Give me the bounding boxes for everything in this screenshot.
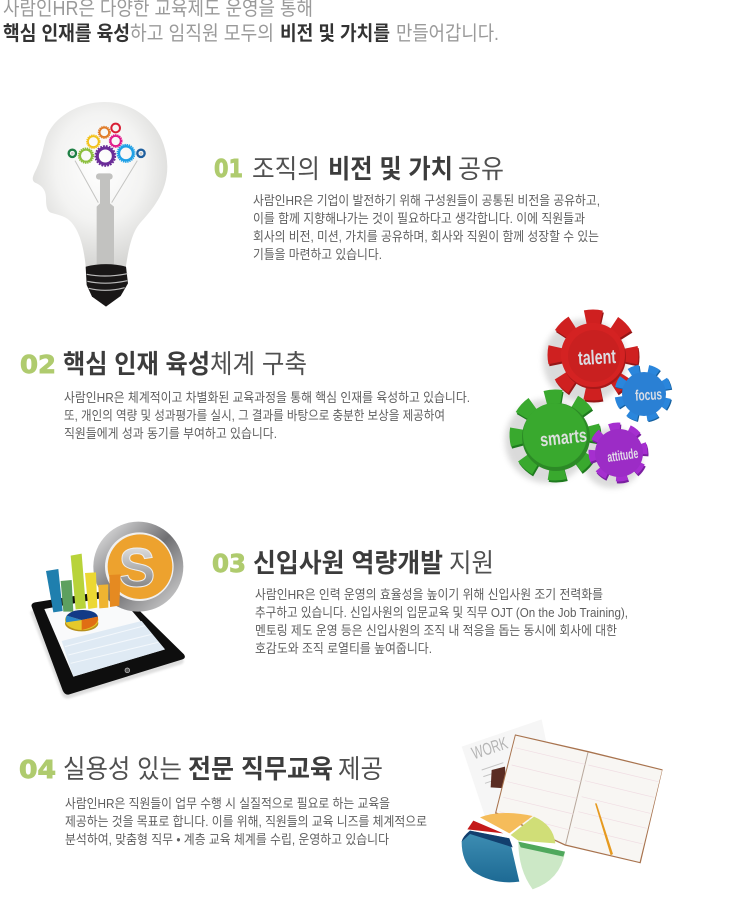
gear: focus: focus (635, 386, 663, 405)
icon: tablet with charts and coin (30, 522, 185, 698)
heading 03: 지원 (449, 548, 494, 578)
intro heading: 핵심 인재를 육성 (3, 22, 130, 45)
gear: focus (615, 365, 672, 422)
body 01: 이를 함께 지향해나가는 것이 필요하다고 생각합니다. 이에 직원들과 (253, 211, 585, 226)
heading 01 (252, 154, 504, 184)
gear: attitude (585, 419, 652, 487)
heading 01: 비전 및 가치 (328, 154, 453, 184)
heading 04: 전문 직무교육 (188, 754, 333, 784)
section 02 (20, 349, 470, 441)
section 04 (19, 754, 427, 847)
body 01: 기틀을 마련하고 있습니다. (253, 247, 382, 262)
pencil (595, 803, 613, 855)
heading 04: 실용성 있는 (63, 754, 182, 784)
coin (93, 522, 183, 612)
number 02: 02 (20, 350, 56, 379)
small gears (69, 124, 145, 165)
work paper: WORK (469, 733, 510, 763)
heading 04: 제공 (338, 754, 383, 784)
gear: talent: talent (577, 346, 617, 370)
pie chart (65, 610, 98, 631)
coin: S (119, 536, 155, 598)
number 03: 03 (212, 549, 246, 578)
body 01: 회사의 비전, 미션, 가치를 공유하며, 회사와 직원이 함께 성장할 수 있는 (253, 229, 599, 244)
intro heading: 비전 및 가치를 (280, 22, 390, 45)
pie chart (462, 813, 565, 889)
body 01: 사람인HR은 기업이 발전하기 위해 구성원들이 공통된 비전을 공유하고, (253, 193, 600, 208)
heading 02: 핵심 인재 육성 (63, 349, 210, 379)
number 01: 01 (214, 154, 243, 183)
body 04 (65, 796, 427, 847)
gear: talent (555, 317, 632, 395)
section 01 (214, 154, 600, 262)
notebook (495, 734, 663, 863)
body 02: 또, 개인의 역량 및 성과평가를 실시, 그 결과를 바탕으로 충분한 보상을 제공하여 (64, 408, 445, 423)
body 02 (64, 390, 470, 441)
section 03 (212, 548, 628, 656)
icon: light bulb head with gears (33, 102, 167, 307)
body 03: 호감도와 조직 로열티를 높여줍니다. (255, 641, 432, 656)
intro heading: 하고 임직원 모두의 (130, 22, 274, 45)
heading 03: 신입사원 역량개발 (253, 548, 443, 578)
heading 02 (63, 349, 307, 379)
body 04: 제공하는 것을 목표로 합니다. 이를 위해, 직원들의 교육 니즈를 체계적으로 (65, 814, 427, 829)
body 04: 분석하여, 맞춤형 직무 • 계층 교육 체계를 수립, 운영하고 있습니다 (65, 832, 389, 847)
icon: notebook, work paper and pie chart (462, 719, 663, 889)
gear: smarts: smarts (539, 426, 588, 451)
body 01 (253, 193, 600, 262)
body 03: 사람인HR은 인력 운영의 효율성을 높이기 위해 신입사원 조기 전력화를 (255, 587, 603, 602)
gear: attitude: attitude (606, 445, 639, 465)
intro heading: 만들어갑니다. (396, 22, 499, 45)
body 03 (255, 587, 628, 656)
body 02: 사람인HR은 체계적이고 차별화된 교육과정을 통해 핵심 인재를 육성하고 있습니다. (64, 390, 470, 405)
body 03: 추구하고 있습니다. 신입사원의 입문교육 및 직무 OJT (On the Job Training), (255, 605, 628, 620)
bar chart (46, 554, 121, 612)
heading 01: 조직의 (252, 154, 320, 184)
icon: four gears (503, 317, 672, 489)
intro heading (3, 0, 499, 45)
body 03: 멘토링 제도 운영 등은 신입사원의 조직 내 적응을 돕는 동시에 회사에 대한 (255, 623, 617, 638)
heading 02: 체계 구축 (210, 349, 307, 379)
gear: smarts (503, 383, 608, 489)
heading 04 (63, 754, 383, 784)
body 02: 직원들에게 성과 동기를 부여하고 있습니다. (64, 426, 277, 441)
work paper (462, 719, 560, 817)
heading 01: 공유 (458, 154, 504, 184)
number 04: 04 (19, 755, 56, 784)
body 04: 사람인HR은 직원들이 업무 수행 시 실질적으로 필요로 하는 교육을 (65, 796, 390, 811)
